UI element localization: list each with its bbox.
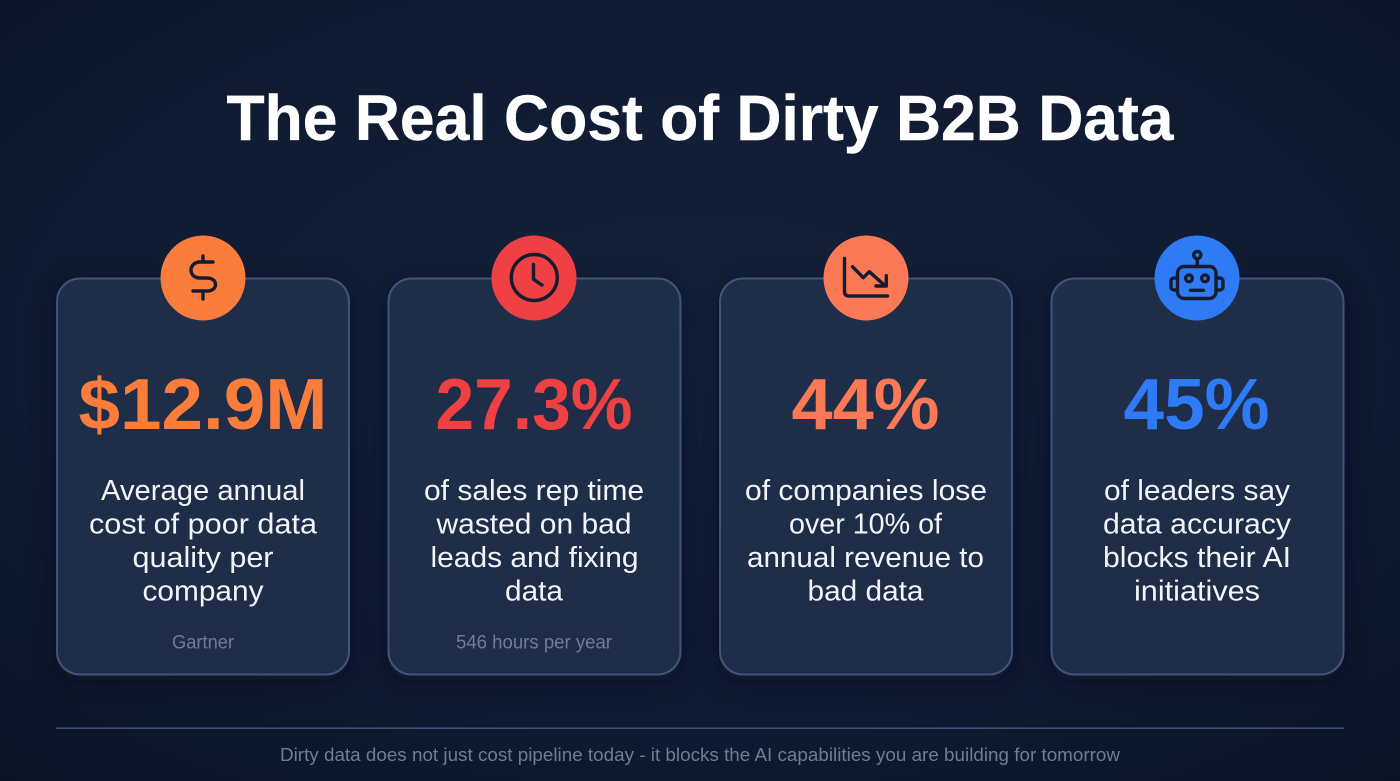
panel: annual cost (56, 236, 349, 680)
icon: dollar sign (160, 236, 246, 320)
panel: sales rep time (388, 236, 681, 680)
description: initiatives (1134, 576, 1260, 608)
statistic: 27.3% (436, 365, 632, 445)
description: wasted on bad (435, 508, 632, 540)
source note: Gartner (172, 632, 235, 654)
description: bad data (808, 576, 924, 608)
description: leads and fixing (430, 542, 638, 574)
description: over 10% of (789, 508, 943, 540)
description: quality per (132, 542, 274, 574)
description: blocks their AI (1103, 542, 1291, 574)
statistic: 44% (792, 365, 940, 445)
description: annual revenue to (747, 542, 984, 574)
panel: revenue loss (720, 236, 1013, 680)
description: of sales rep time (424, 475, 644, 507)
panel: AI initiatives (1051, 236, 1344, 680)
description: cost of poor data (89, 508, 318, 540)
description: data accuracy (1103, 508, 1292, 540)
description: of companies lose (745, 475, 987, 507)
statistic: 45% (1124, 365, 1270, 445)
title: The Real Cost of Dirty B2B Data (226, 82, 1174, 154)
icon: declining chart (824, 236, 908, 320)
description: Average annual (101, 475, 305, 507)
icon: robot (1154, 236, 1240, 320)
description: company (142, 576, 264, 608)
statistic: $12.9M (78, 365, 328, 445)
icon: clock (492, 236, 576, 320)
footer note: Dirty data does not just cost pipeline today - it blocks the AI capabilities you are building for tomorrow (280, 744, 1121, 765)
note: 546 hours per year (456, 632, 613, 654)
description: of leaders say (1104, 475, 1291, 507)
description: data (505, 576, 564, 608)
